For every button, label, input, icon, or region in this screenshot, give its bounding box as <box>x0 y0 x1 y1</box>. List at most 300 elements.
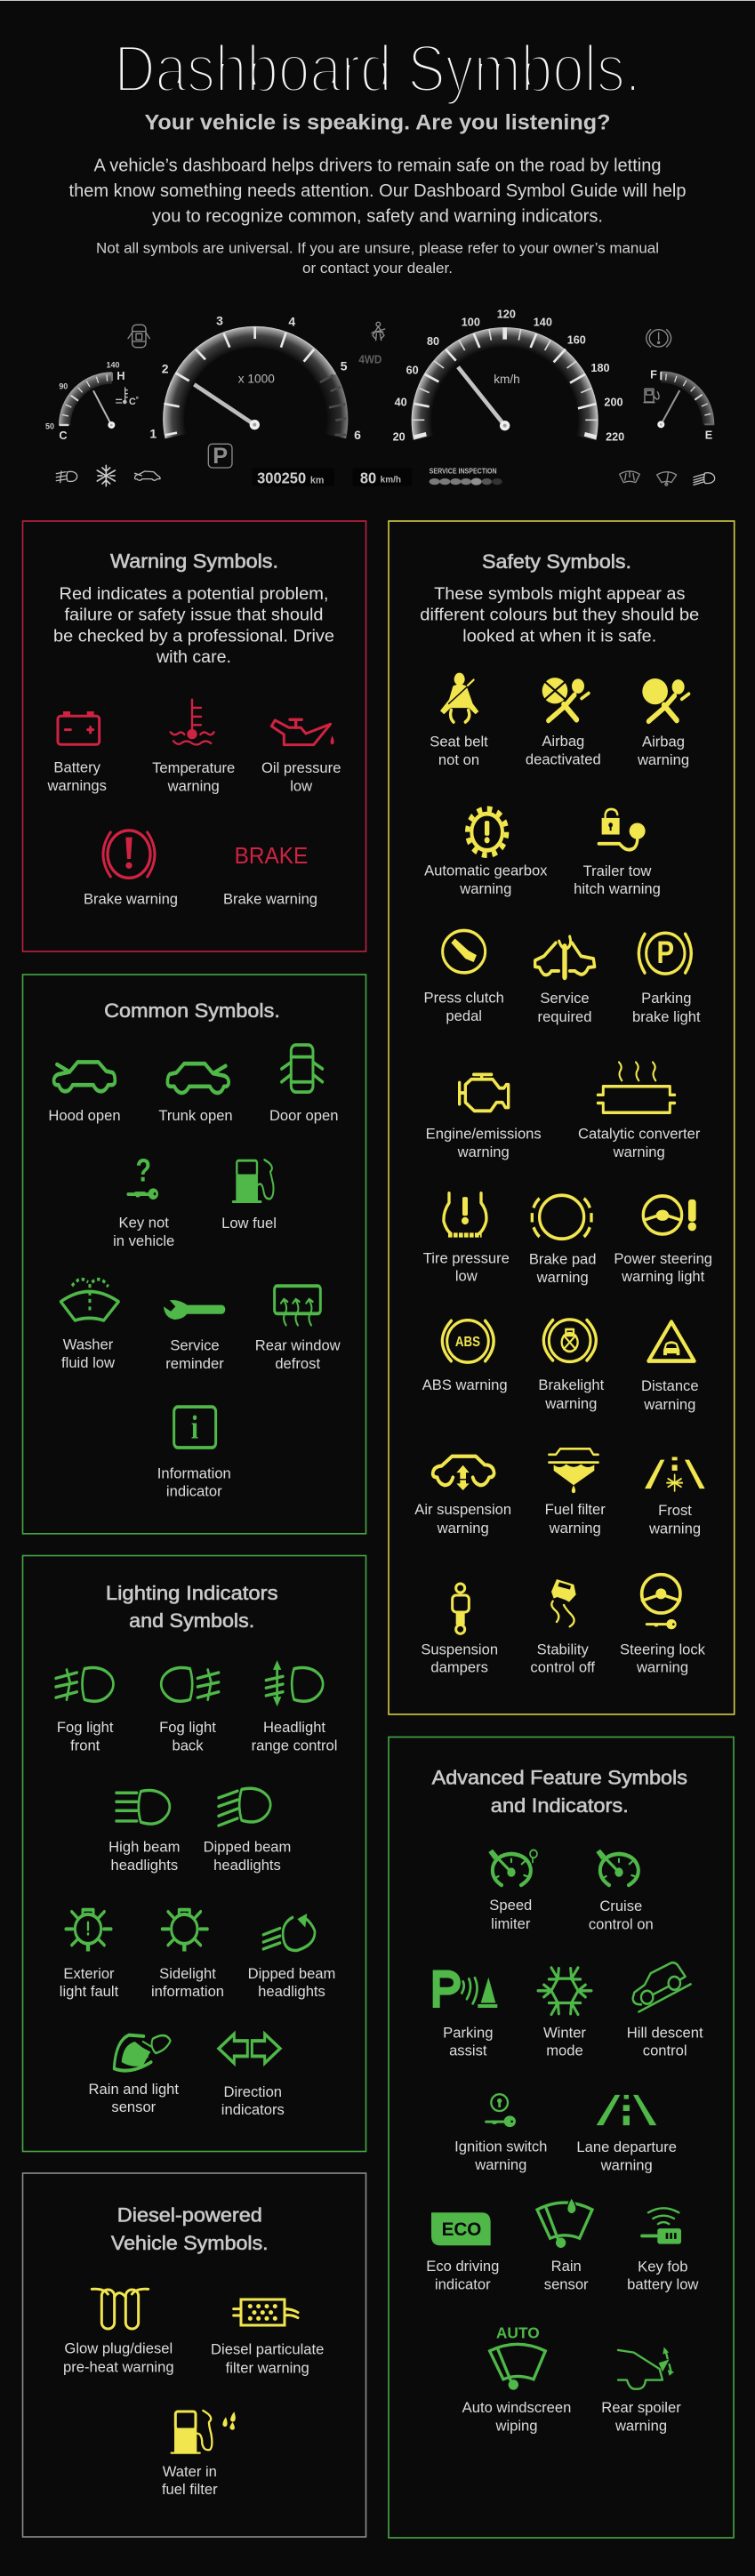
symbol: eco driving indicator: Eco driving <box>426 2258 499 2275</box>
symbol: ABS warning: ABS warning <box>422 1376 508 1393</box>
symbol: direction indicators <box>219 2034 285 2118</box>
warning description: with care. <box>156 648 231 667</box>
4WD label: 4WD <box>358 353 382 366</box>
icon: steering wheel and key <box>642 1575 680 1629</box>
speed display: 80 <box>360 469 376 486</box>
warning description: Red indicates a potential problem, <box>59 585 329 604</box>
icon: tire pressure <box>444 1193 486 1235</box>
icon: ABS: ABS <box>455 1335 480 1350</box>
icon: BRAKE wordmark: BRAKE <box>235 844 308 869</box>
disclaimer text <box>96 240 659 277</box>
odometer: km <box>310 475 324 486</box>
symbol: lane departure warning: warning <box>600 2156 653 2173</box>
tachometer: 3 <box>216 314 223 328</box>
fuel gauge: E <box>705 429 712 441</box>
symbol: headlight range control <box>252 1660 337 1753</box>
symbol: sidelight information: Sidelight <box>159 1965 216 1982</box>
symbol: oil pressure low <box>261 719 341 794</box>
symbol: press clutch pedal: pedal <box>446 1007 482 1024</box>
symbol: service required: required <box>538 1008 591 1025</box>
symbol: fog light front: Fog light <box>57 1719 114 1736</box>
panel: lighting indicators <box>23 1556 366 2152</box>
symbol: dipped beam headlights <box>204 1788 291 1874</box>
icon: lane road <box>597 2095 656 2125</box>
safety description: These symbols might appear as <box>434 585 685 604</box>
icon: snowflake <box>538 1968 591 2014</box>
fuel gauge: F <box>650 369 657 381</box>
symbol: rain sensor: sensor <box>544 2275 589 2292</box>
speedometer: 160 <box>567 333 586 346</box>
icon: brakelight <box>543 1320 596 1361</box>
icon: car top view <box>282 1045 323 1092</box>
tachometer: 1 <box>149 426 157 440</box>
icon: airbag <box>642 678 689 721</box>
symbol: exterior light fault <box>60 1910 119 2000</box>
icon: fuel small <box>644 389 659 403</box>
temperature gauge: C <box>59 429 68 442</box>
icon: parking assist <box>437 1974 497 2008</box>
symbol: brakelight warning: warning <box>544 1395 597 1412</box>
temperature gauge <box>45 360 125 442</box>
icon: catalytic converter <box>598 1063 675 1112</box>
symbol: water in fuel filter: fuel filter <box>162 2481 218 2498</box>
symbol: stability control off: control off <box>530 1659 595 1676</box>
symbol: glow plug: Glow plug/diesel <box>64 2340 173 2357</box>
icon: brake warning small <box>647 330 671 347</box>
panel: diesel-powered vehicle symbols <box>23 2173 366 2537</box>
symbol: temperature warning: warning <box>167 777 220 794</box>
subtitle: Your vehicle is speaking. Are you listening? <box>144 110 610 134</box>
icon: ECO badge: ECO <box>442 2219 481 2240</box>
symbol: seat belt not on: not on <box>438 751 479 768</box>
symbol: speed limiter: Speed <box>489 1897 532 1914</box>
icon: windscreen small <box>620 471 639 483</box>
symbol: dipped beam headlights auto: Dipped beam <box>248 1965 335 1982</box>
icon: information: i <box>191 1409 198 1446</box>
icon: bulb with exclamation <box>66 1910 111 1952</box>
symbol: airbag deactivated: Airbag <box>542 733 584 750</box>
symbol: washer fluid low: Washer <box>63 1336 114 1353</box>
icon: high beam <box>116 1790 170 1824</box>
speedometer: 120 <box>497 308 516 320</box>
symbol: fog light back <box>159 1668 219 1753</box>
symbol: rear window defrost: defrost <box>275 1355 320 1372</box>
symbol: airbag warning <box>637 678 689 768</box>
icon: seat belt <box>440 673 478 722</box>
symbol: automatic gearbox warning: warning <box>459 880 511 897</box>
symbol: suspension dampers <box>421 1584 498 1676</box>
fuel gauge <box>650 369 714 441</box>
icon: cruise control gauge <box>596 1850 639 1885</box>
symbol: automatic gearbox warning: Automatic gearbox <box>424 862 548 879</box>
intro text <box>69 156 687 226</box>
icon: front fog <box>56 1668 113 1701</box>
symbol: rain and light sensor: Rain and light <box>89 2081 179 2098</box>
icon: dipped beam small <box>694 473 715 485</box>
icon: steering wheel with exclamation <box>643 1196 696 1234</box>
symbol: brake text warning: Brake warning <box>223 891 317 908</box>
speedometer: 40 <box>395 397 407 409</box>
symbol: cruise control on: Cruise <box>599 1898 642 1914</box>
symbol: ABS warning <box>422 1320 508 1393</box>
icon: air suspension car <box>433 1457 494 1490</box>
symbol: temperature warning <box>152 700 235 794</box>
symbol: distance warning: Distance <box>641 1377 699 1394</box>
icon: car with wrench <box>535 936 595 977</box>
speedometer: 180 <box>590 362 610 374</box>
intro text: A vehicle’s dashboard helps drivers to remain safe on the road by letting <box>94 156 662 176</box>
symbol: diesel particulate filter <box>211 2299 324 2376</box>
symbol: parking brake light <box>632 933 701 1025</box>
symbol: frost warning <box>645 1457 705 1537</box>
symbol: cruise control on <box>589 1850 654 1933</box>
panel: advanced feature symbols <box>389 1737 734 2538</box>
symbol: catalytic converter warning: Catalytic converter <box>578 1125 701 1142</box>
speed display: km/h <box>381 476 401 486</box>
icon: question mark and key: ? <box>136 1152 151 1188</box>
symbol: steering lock warning: warning <box>636 1659 688 1676</box>
symbol: battery warnings <box>46 711 107 794</box>
icon: road with snowflake <box>645 1457 705 1491</box>
heading: lighting indicators: Lighting Indicators <box>106 1582 278 1604</box>
symbol: auto windscreen wiping: wiping <box>494 2417 538 2434</box>
symbol: washer fluid low: fluid low <box>61 1354 116 1371</box>
symbol: information indicator: Information <box>157 1465 231 1481</box>
symbol: seat belt not on <box>430 673 488 768</box>
symbol: water in fuel filter <box>162 2411 236 2498</box>
symbol: hill descent control: control <box>643 2042 687 2059</box>
symbol: dipped beam headlights auto <box>248 1914 335 2000</box>
symbol: seat belt not on: Seat belt <box>430 734 488 750</box>
icon: parking small: P <box>213 444 228 469</box>
symbol: high beam headlights: headlights <box>110 1857 178 1874</box>
tachometer: 4 <box>288 315 295 329</box>
safety description: looked at when it is safe. <box>462 627 656 646</box>
symbol: exterior light fault: light fault <box>60 1983 119 2000</box>
icon: car trunk <box>167 1063 229 1093</box>
symbol: sidelight information <box>151 1910 224 2000</box>
icon: suspension damper <box>453 1584 469 1633</box>
symbol: brake pad warning <box>529 1195 597 1286</box>
symbol: tire pressure low: low <box>455 1268 478 1285</box>
symbol: brake warning icon <box>84 831 178 908</box>
symbol: stability control off <box>530 1579 595 1676</box>
heading: lighting indicators <box>106 1582 278 1632</box>
symbol: fog light back: back <box>172 1737 204 1753</box>
symbol: parking assist <box>437 1974 497 2059</box>
temperature gauge: H <box>116 370 125 382</box>
tachometer: 5 <box>341 359 348 373</box>
symbol: sidelight information: information <box>151 1983 224 2000</box>
symbol: dipped beam headlights: headlights <box>213 1857 281 1874</box>
symbol: low fuel: Low fuel <box>221 1215 277 1232</box>
symbol: high beam headlights <box>108 1790 180 1874</box>
symbol: frost warning: Frost <box>658 1502 692 1519</box>
symbol: speed limiter: limiter <box>491 1915 531 1932</box>
icon: brake circle <box>103 831 155 878</box>
symbol: brake warning icon: Brake warning <box>84 891 178 908</box>
symbol: tire pressure low <box>423 1193 510 1285</box>
symbol: speed limiter <box>488 1850 537 1932</box>
panel: safety symbols <box>389 521 735 1714</box>
symbol: airbag deactivated <box>526 678 601 767</box>
warning description <box>53 585 334 667</box>
disclaimer text: or contact your dealer. <box>302 260 453 277</box>
panel: common symbols <box>23 975 366 1534</box>
temperature gauge: 50 <box>45 422 54 431</box>
icon: oil can <box>271 719 334 745</box>
icon: ignition and key <box>486 2094 516 2127</box>
symbol: catalytic converter warning <box>578 1063 701 1160</box>
icon: key fob <box>642 2208 681 2244</box>
symbol: air suspension warning <box>414 1457 511 1537</box>
symbol: hill descent control: Hill descent <box>627 2024 703 2041</box>
symbol: lane departure warning <box>576 2095 677 2173</box>
symbol: diesel particulate filter: filter warning <box>226 2359 309 2376</box>
symbol: winter mode: Winter <box>543 2024 586 2041</box>
icon: rear fog <box>161 1668 219 1701</box>
icon: sidelight bulb <box>162 1910 207 1952</box>
symbol: lane departure warning: Lane departure <box>576 2139 677 2155</box>
symbol: service reminder <box>164 1300 224 1372</box>
odometer <box>252 469 334 486</box>
symbol: door open: Door open <box>269 1107 338 1124</box>
icon: headlight range <box>266 1660 323 1706</box>
symbol: cruise control on: control on <box>589 1916 654 1933</box>
symbol: steering lock warning <box>620 1575 706 1676</box>
temperature gauge: 140 <box>106 360 119 369</box>
symbol: brake pad warning: Brake pad <box>529 1250 597 1268</box>
safety description <box>420 585 699 646</box>
icon: seat belt small <box>372 322 385 341</box>
icon: airbag crossed <box>542 678 589 720</box>
symbol: winter mode <box>538 1968 591 2059</box>
icon: fuel filter <box>549 1448 598 1493</box>
symbol: airbag warning: Airbag <box>642 734 685 750</box>
symbol: door open <box>269 1045 338 1124</box>
heading: diesel-powered vehicle symbols: Diesel-powered <box>117 2204 262 2227</box>
heading: advanced feature symbols: Advanced Feature Symbols <box>432 1766 687 1788</box>
symbol: automatic gearbox warning <box>424 809 548 897</box>
symbol: rain and light sensor: sensor <box>111 2099 157 2115</box>
heading: diesel-powered vehicle symbols: Vehicle Symbols. <box>111 2232 269 2254</box>
symbol: trunk open: Trunk open <box>158 1107 233 1124</box>
symbol: air suspension warning: Air suspension <box>414 1501 511 1518</box>
symbol: power steering warning light: Power steering <box>614 1250 712 1267</box>
symbol: press clutch pedal: Press clutch <box>424 989 504 1007</box>
icon: clutch pedal <box>443 930 486 973</box>
symbol: engine emissions warning <box>426 1074 542 1160</box>
icon: parking brake: P <box>657 935 674 970</box>
symbol: parking assist: assist <box>449 2042 487 2059</box>
icon: temperature small: C˚ <box>129 397 139 407</box>
symbol: rear window defrost <box>255 1286 341 1372</box>
symbol: diesel particulate filter: Diesel particulate <box>211 2341 324 2358</box>
symbol: rear spoiler warning: Rear spoiler <box>601 2399 681 2416</box>
symbol: key not in vehicle: Key not <box>119 1215 169 1231</box>
symbol: parking brake light: brake light <box>632 1008 701 1025</box>
icon: distance triangle <box>648 1322 695 1361</box>
symbol: power steering warning light: warning light <box>621 1268 705 1285</box>
symbol: headlight range control: range control <box>252 1737 337 1753</box>
symbol: rear window defrost: Rear window <box>255 1337 341 1353</box>
speedometer: 20 <box>393 430 406 443</box>
icon: wiper with raindrop <box>537 2198 592 2248</box>
warning description: failure or safety issue that should <box>64 606 324 625</box>
speedometer: 60 <box>406 365 419 377</box>
icon: car on slope <box>633 1962 691 2011</box>
tachometer: x 1000 <box>238 372 275 385</box>
symbol: direction indicators: Direction <box>224 2083 282 2100</box>
heading: advanced feature symbols <box>432 1766 687 1817</box>
symbol: airbag warning: warning <box>637 751 689 768</box>
symbol: key fob battery low <box>627 2208 699 2293</box>
symbol: catalytic converter warning: warning <box>613 1144 665 1160</box>
symbol: service reminder: reminder <box>165 1355 224 1372</box>
symbol: headlight range control: Headlight <box>263 1719 325 1736</box>
icon: particulate filter <box>234 2299 298 2325</box>
symbol: exterior light fault: Exterior <box>63 1965 115 1982</box>
icon: dipped beam with arrow <box>263 1914 315 1950</box>
symbol: glow plug: pre-heat warning <box>63 2358 174 2375</box>
symbol: trailer tow hitch warning <box>574 809 661 897</box>
icon: brake pad <box>532 1195 591 1239</box>
safety description: different colours but they should be <box>420 606 699 625</box>
symbol: fuel filter warning: Fuel filter <box>545 1501 606 1518</box>
symbol: airbag deactivated: deactivated <box>526 750 601 767</box>
speedometer: 200 <box>604 397 623 409</box>
symbol: eco driving indicator: indicator <box>435 2275 491 2292</box>
icon: wiper small <box>657 472 677 486</box>
symbol: auto windscreen wiping: Auto windscreen <box>462 2399 571 2416</box>
symbol: stability control off: Stability <box>537 1641 589 1657</box>
icon: rain light sensor <box>114 2035 171 2071</box>
symbol: parking assist: Parking <box>443 2024 493 2041</box>
symbol: hill descent control <box>627 1962 703 2059</box>
symbol: frost warning: warning <box>648 1521 701 1537</box>
icon: fog light small <box>56 471 77 483</box>
symbol: rear spoiler warning: warning <box>614 2417 667 2434</box>
symbol: dipped beam headlights auto: headlights <box>258 1983 325 2000</box>
symbol: rain sensor: Rain <box>551 2258 582 2275</box>
symbol: hood open <box>48 1062 121 1124</box>
symbol: washer fluid low <box>60 1280 118 1371</box>
symbol: glow plug <box>63 2289 174 2375</box>
symbol: water in fuel filter: Water in <box>163 2463 217 2480</box>
symbol: auto windscreen wiping <box>462 2323 571 2434</box>
icon: glow plug coil <box>92 2289 149 2329</box>
symbol: brake pad warning: warning <box>536 1269 589 1286</box>
intro text: them know something needs attention. Our Dashboard Symbol Guide will help <box>69 181 687 201</box>
symbol: temperature warning: Temperature <box>152 759 235 776</box>
icon: parking small <box>208 444 232 469</box>
symbol: brake text warning <box>223 844 317 908</box>
symbol: oil pressure low: Oil pressure <box>261 759 341 776</box>
symbol: fog light front <box>56 1668 114 1753</box>
symbol: power steering warning light <box>614 1196 712 1285</box>
right half of cluster <box>353 308 715 486</box>
symbol: hood open: Hood open <box>48 1107 121 1124</box>
symbol: engine emissions warning: warning <box>457 1144 510 1160</box>
symbol: key not in vehicle <box>113 1152 174 1249</box>
speedometer: 220 <box>606 430 624 443</box>
symbol: direction indicators: indicators <box>221 2101 285 2118</box>
symbol: key fob battery low: Key fob <box>638 2259 687 2275</box>
symbol: trailer tow hitch warning: Trailer tow <box>583 863 652 879</box>
panel: warning symbols <box>23 521 366 951</box>
symbol: trailer tow hitch warning: hitch warning <box>574 880 661 897</box>
symbol: suspension dampers: dampers <box>430 1659 488 1676</box>
symbol: eco driving indicator <box>426 2212 499 2292</box>
icon: fuel pump <box>233 1160 273 1201</box>
symbol: tire pressure low: Tire pressure <box>423 1249 510 1266</box>
symbol: distance warning <box>641 1322 699 1413</box>
icon: turn arrows <box>219 2034 280 2063</box>
icon: dipped beam <box>219 1788 270 1826</box>
icon: temperature small <box>116 388 139 407</box>
icon: windscreen washer <box>60 1280 118 1320</box>
symbol: information indicator: indicator <box>166 1483 222 1500</box>
symbol: steering lock warning: Steering lock <box>620 1641 706 1657</box>
symbol: fog light front: front <box>70 1737 100 1753</box>
symbol: key fob battery low: battery low <box>627 2276 699 2293</box>
icon: rear spoiler <box>618 2347 674 2389</box>
icon: auto wiper: AUTO <box>496 2323 540 2341</box>
title: Dashboard Symbols. <box>114 31 640 106</box>
disclaimer text: Not all symbols are universal. If you are unsure, please refer to your owner’s manual <box>96 240 659 257</box>
icon: speed limiter gauge <box>488 1850 537 1885</box>
speedometer: km/h <box>494 373 520 386</box>
symbol: battery warnings: warnings <box>46 777 107 794</box>
icon: tow hitch and lock <box>598 809 646 850</box>
symbol: parking brake light: Parking <box>641 990 691 1007</box>
icon: snowflake small <box>97 465 115 486</box>
symbol: brakelight warning: Brakelight <box>538 1376 605 1393</box>
tachometer: 6 <box>354 428 361 442</box>
symbol: key not in vehicle: in vehicle <box>113 1232 174 1249</box>
dashboard cluster illustration <box>45 308 715 486</box>
icon: car small <box>135 471 160 480</box>
symbol: distance warning: warning <box>643 1396 695 1413</box>
symbol: fuel filter warning <box>545 1448 606 1537</box>
left half of cluster <box>45 314 361 486</box>
symbol: press clutch pedal <box>424 930 504 1024</box>
symbol: suspension dampers: Suspension <box>421 1641 498 1657</box>
odometer: 300250 <box>257 469 306 486</box>
tachometer: 2 <box>162 362 169 376</box>
symbol: ignition switch warning: Ignition switch <box>454 2139 547 2155</box>
symbol: high beam headlights: High beam <box>108 1839 180 1856</box>
heading: advanced feature symbols: and Indicators. <box>491 1794 629 1817</box>
intro text: you to recognize common, safety and warning indicators. <box>152 206 603 226</box>
symbol: rain sensor <box>537 2198 592 2292</box>
speed display <box>353 469 412 486</box>
speedometer: 100 <box>462 316 480 328</box>
icon: wrench <box>164 1300 221 1320</box>
symbol: rear spoiler warning <box>601 2347 681 2434</box>
tachometer <box>149 314 361 442</box>
speedometer <box>393 308 624 443</box>
symbol: air suspension warning: warning <box>437 1520 489 1537</box>
symbol: trunk open <box>158 1063 233 1124</box>
symbol: winter mode: mode <box>546 2042 583 2059</box>
symbol: fog light back: Fog light <box>159 1719 216 1736</box>
icon: coolant temperature <box>171 700 214 744</box>
symbol: oil pressure low: low <box>290 777 313 794</box>
heading: safety symbols: Safety Symbols. <box>482 550 631 573</box>
heading: common symbols: Common Symbols. <box>104 999 280 1022</box>
icon: fuel pump with drops <box>172 2411 236 2453</box>
